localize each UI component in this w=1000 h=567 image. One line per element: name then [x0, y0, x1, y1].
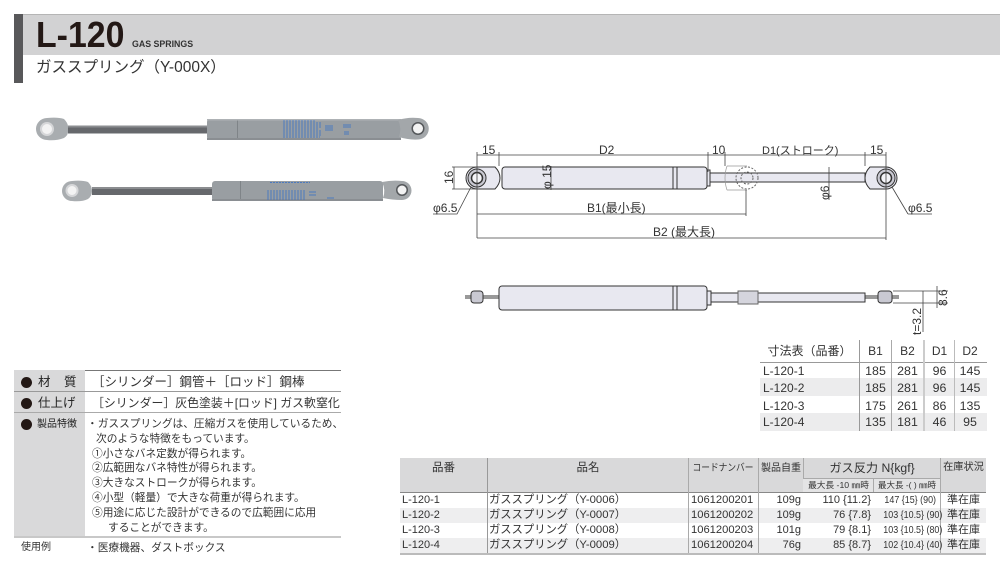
dimension labels: D2: [599, 143, 615, 157]
dimension labels: B1(最小長): [587, 201, 646, 215]
product table row 4: 85 {8.7}: [833, 539, 871, 551]
features row: 次のような特徴をもっています。: [96, 433, 255, 445]
product table row 3: 103 {10.5} (80): [883, 524, 942, 536]
size table row 3: 86: [933, 399, 946, 413]
size table header: B2: [900, 344, 915, 358]
product table row 2: ガススプリング（Y-0007）: [489, 509, 626, 521]
features row: ①小さなバネ定数が得られます。: [92, 448, 251, 460]
product table row 2: 1061200202: [691, 509, 753, 521]
finish row: 仕上げ: [38, 396, 76, 410]
product table header: [432, 461, 984, 490]
features row: ③大きなストロークが得られます。: [92, 477, 262, 489]
product table row 3: 101g: [777, 524, 801, 536]
features row: ・ガススプリングは、圧縮ガスを使用しているため、: [87, 418, 343, 430]
product photo: gas springs: [36, 118, 429, 202]
dimension labels: 15: [870, 143, 884, 157]
size table header: [767, 344, 978, 358]
product table row 3: 1061200203: [691, 524, 753, 536]
size table row 4: 95: [963, 415, 977, 429]
product table row 2: 準在庫: [947, 509, 980, 521]
product table header: コードナンバー: [693, 463, 753, 474]
header band: [14, 14, 1000, 83]
size table row 2: L-120-2: [763, 381, 804, 395]
product table row 1: 準在庫: [947, 494, 980, 506]
features row: ⑤用途に応じた設計ができるので広範囲に応用: [92, 507, 316, 519]
product table row 1: 110 {11.2}: [822, 494, 871, 506]
features row: することができます。: [108, 522, 214, 534]
size table row 4: 135: [865, 415, 886, 429]
material row: ［シリンダー］鋼管＋［ロッド］鋼棒: [92, 375, 305, 389]
front view of spring: [466, 166, 897, 190]
dimension labels: φ 15: [540, 164, 554, 189]
dimension labels: 10: [712, 143, 726, 157]
size table row 3: 135: [960, 399, 980, 413]
size table row 2: 185: [865, 381, 886, 395]
dimension drawing: [433, 143, 950, 335]
product table row 3: ガススプリング（Y-0008）: [489, 524, 626, 536]
size table row 4: L-120-4: [763, 415, 804, 429]
product table header: 最大長 -( ) ㎜時: [878, 480, 936, 490]
features row: 製品特徴: [37, 419, 77, 430]
usage row: ・医療機器、ダストボックス: [87, 542, 226, 554]
product table row 4: [402, 538, 980, 551]
product table row 2: 76 {7.8}: [833, 509, 871, 521]
size table row 2: 281: [897, 381, 918, 395]
dimension labels: B2 (最大長): [653, 225, 715, 239]
dimension labels: [433, 143, 950, 335]
product table row 4: 準在庫: [947, 539, 980, 551]
product table row 2: [402, 508, 980, 521]
material and features panel: [14, 370, 343, 554]
dimension labels: 8.6: [936, 289, 950, 306]
subtitle english: GAS SPRINGS: [132, 39, 193, 49]
subtitle japanese: ガススプリング（Y-000X）: [36, 59, 226, 76]
product table header: 品番: [432, 462, 455, 474]
product table row 3: 79 {8.1}: [833, 524, 871, 536]
product table row 4: 76g: [783, 539, 801, 551]
product table: [400, 458, 986, 555]
product table row 1: 147 {15} (90): [884, 494, 936, 506]
product table row 2: L-120-2: [402, 509, 440, 521]
size table row 2: 96: [933, 381, 946, 395]
size table row 3: 175: [865, 399, 886, 413]
size table row 4: 181: [897, 415, 918, 429]
dimension labels: 16: [442, 170, 456, 184]
size table row 3: [763, 399, 980, 413]
size table header: D1: [932, 344, 947, 358]
size table header: 寸法表（品番）: [767, 344, 852, 358]
features row: ④小型（軽量）で大きな荷重が得られます。: [92, 492, 305, 504]
product table row 3: [402, 523, 980, 536]
product table row 1: 1061200201: [691, 494, 753, 506]
product table row 4: L-120-4: [402, 539, 440, 551]
dimension labels: D1(ストローク): [762, 144, 838, 157]
dimension labels: φ6.5: [433, 201, 458, 215]
size table row 1: 145: [960, 364, 980, 378]
size table row 1: [763, 364, 980, 378]
usage row: 使用例: [21, 542, 51, 553]
product table header: ガス反力 N{kgf}: [829, 461, 915, 475]
features row: [21, 418, 343, 534]
product table header: 最大長 -10 ㎜時: [808, 480, 869, 490]
product table row 2: 103 {10.5} (90): [883, 509, 942, 521]
product table header: 品名: [576, 462, 600, 474]
size table row 2: 145: [960, 381, 980, 395]
dimension labels: φ6: [818, 185, 832, 200]
product table header: 在庫状況: [943, 462, 984, 473]
product table header: 製品自重: [761, 463, 801, 474]
size table row 1: 96: [933, 364, 946, 378]
usage row: [21, 541, 226, 554]
product table row 1: ガススプリング（Y-0006）: [489, 494, 626, 506]
size table row 3: 261: [897, 399, 918, 413]
product table row 3: L-120-3: [402, 524, 440, 536]
dimension lines: [433, 152, 948, 332]
size table header: B1: [868, 344, 883, 358]
material row: 材: [38, 375, 51, 389]
finish row: ［シリンダー］灰色塗装＋[ロッド] ガス軟窒化: [92, 396, 340, 410]
size table row 4: [763, 415, 977, 429]
size table row 1: L-120-1: [763, 364, 804, 378]
product table row 1: [402, 493, 980, 506]
product table row 4: ガススプリング（Y-0009）: [489, 539, 626, 551]
product table row 1: L-120-1: [402, 494, 440, 506]
product table row 3: 準在庫: [947, 524, 980, 536]
side view of spring: [465, 286, 899, 310]
size table row 2: [763, 381, 980, 395]
size table row 3: L-120-3: [763, 399, 804, 413]
size table: [760, 340, 987, 431]
dimension labels: t=3.2: [910, 308, 924, 335]
material row: 質: [64, 375, 77, 389]
dimension labels: 15: [482, 143, 496, 157]
features row: ②広範囲なバネ特性が得られます。: [92, 462, 262, 474]
product table row 2: 109g: [777, 509, 801, 521]
product table row 4: 1061200204: [691, 539, 753, 551]
dimension labels: φ6.5: [908, 201, 933, 215]
size table row 1: 281: [897, 364, 918, 378]
product table row 4: 102 {10.4} (40): [883, 539, 942, 551]
title: L-120: [36, 14, 124, 55]
size table row 4: 46: [933, 415, 946, 429]
size table header: D2: [962, 344, 978, 358]
product table row 1: 109g: [777, 494, 801, 506]
size table row 1: 185: [865, 364, 886, 378]
